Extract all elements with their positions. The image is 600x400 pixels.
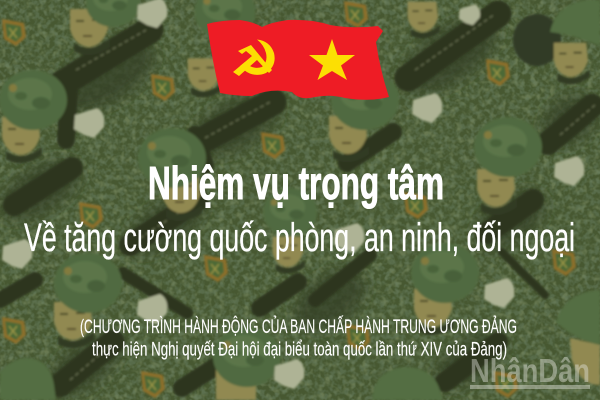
icon: hammer and sickle — [233, 40, 275, 76]
title: Nhiệm vụ trọng tâm — [148, 157, 444, 209]
dark helmet in shadow — [513, 14, 561, 66]
icon: yellow star — [309, 39, 355, 80]
source note — [80, 316, 517, 360]
icon: red flag with hammer, sickle and star — [207, 20, 389, 100]
